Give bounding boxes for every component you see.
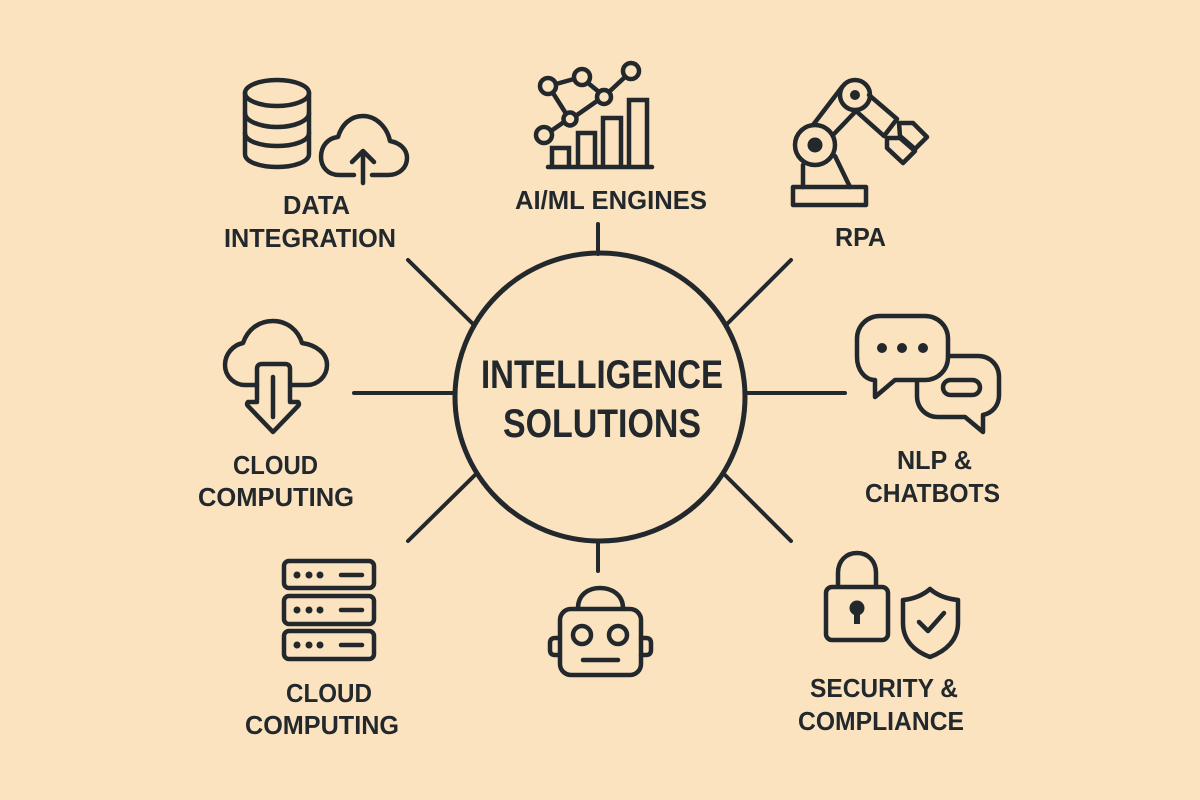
label: nlp and chatbots — [865, 445, 1000, 508]
panel: rpa — [793, 80, 927, 252]
icon: robot head — [550, 588, 651, 675]
label: cloud computing: COMPUTING — [245, 710, 399, 740]
panel: security and compliance — [798, 553, 964, 736]
label: cloud computing: CLOUD — [286, 678, 372, 708]
icon: cloud upload — [321, 116, 407, 183]
label: rpa: RPA — [835, 222, 886, 252]
label: security and compliance: COMPLIANCE — [798, 706, 964, 736]
label: cloud computing — [245, 678, 399, 740]
label: data integration — [224, 190, 396, 253]
label: security and compliance — [798, 673, 964, 736]
icon: chat bubbles — [857, 316, 999, 432]
hub title — [481, 353, 723, 446]
panel: cloud computing bottom left — [245, 561, 399, 740]
label: cloud computing — [198, 450, 354, 512]
icon: network and bar chart — [536, 63, 652, 167]
icon: server rack — [284, 561, 374, 659]
label: security and compliance: SECURITY & — [810, 673, 958, 703]
hub title: SOLUTIONS — [503, 402, 701, 446]
label: data integration: INTEGRATION — [224, 223, 396, 253]
panel: nlp and chatbots — [857, 316, 1000, 508]
icon: robotic arm — [793, 80, 927, 205]
icon: padlock — [826, 553, 888, 640]
label: cloud computing: CLOUD — [233, 450, 318, 480]
label: nlp and chatbots: NLP & — [897, 445, 972, 475]
label: data integration: DATA — [283, 190, 350, 220]
connector spokes — [354, 224, 845, 571]
hub title: INTELLIGENCE — [481, 353, 723, 397]
label: cloud computing: COMPUTING — [198, 482, 354, 512]
icon: database — [245, 80, 309, 167]
label: nlp and chatbots: CHATBOTS — [865, 478, 1000, 508]
label: ai/ml engines: AI/ML ENGINES — [515, 185, 707, 215]
panel: cloud computing left — [198, 321, 354, 512]
central hub circle — [455, 253, 745, 541]
icon: cloud download — [225, 321, 327, 432]
panel: ai/ml engines — [515, 63, 707, 215]
panel: data integration — [224, 80, 407, 253]
icon: shield with check — [903, 589, 958, 657]
